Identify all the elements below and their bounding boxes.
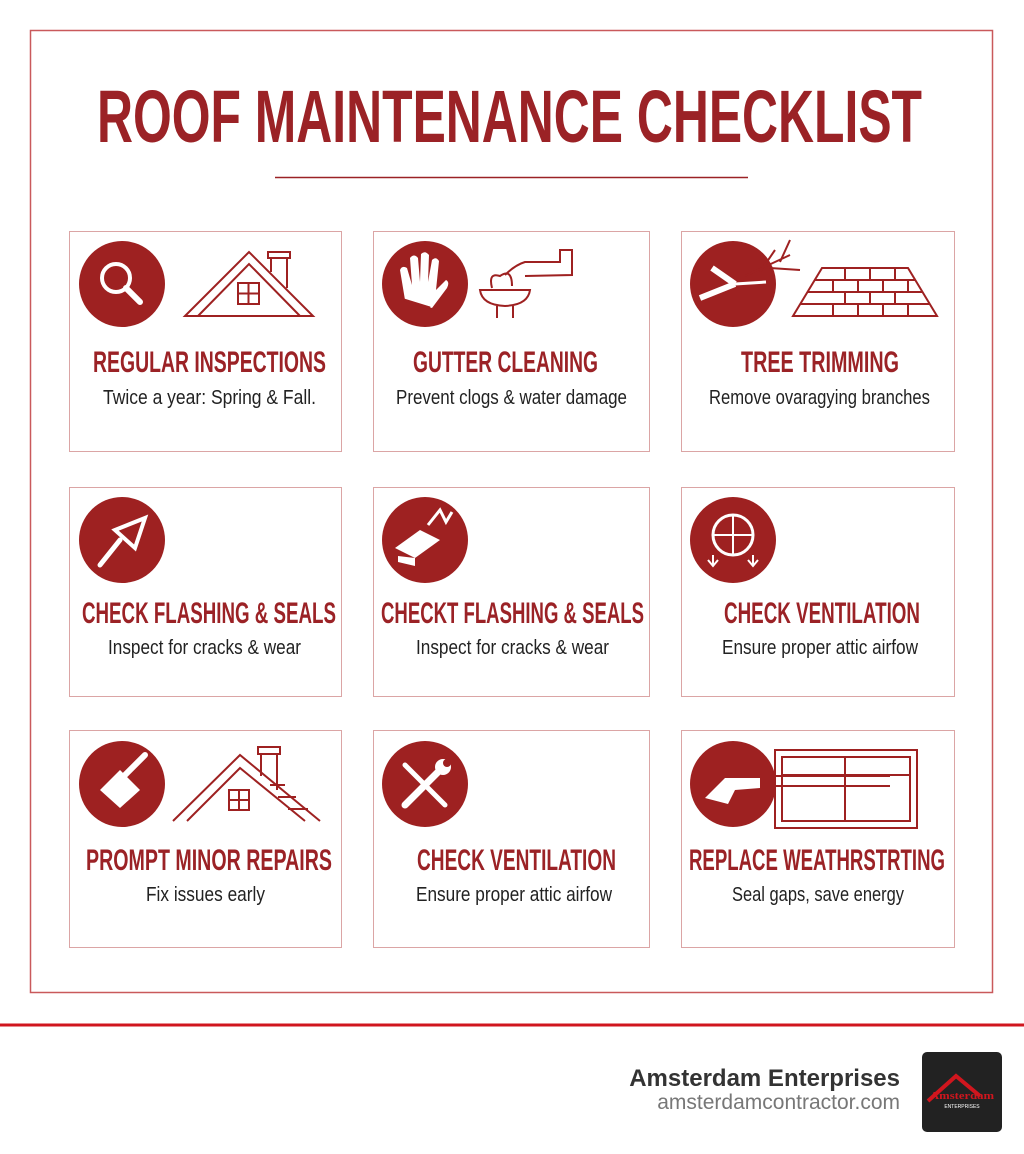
icon: gutter and hand	[480, 250, 572, 318]
heading: TREE TRIMMING	[741, 346, 899, 379]
footer brand: Amsterdam Enterprises	[629, 1065, 900, 1092]
icon: brick roof	[793, 268, 937, 316]
heading: PROMPT MINOR REPAIRS	[86, 844, 332, 877]
heading: GUTTER CLEANING	[413, 346, 598, 379]
card: prompt minor repairs	[70, 730, 342, 948]
card: check ventilation 2	[374, 730, 650, 948]
text: Remove ovaragying branches	[709, 387, 930, 409]
icon: trowel	[79, 497, 165, 583]
logo: Amsterdam	[930, 1090, 994, 1102]
heading: CHECK FLASHING & SEALS	[82, 597, 336, 630]
footer brand	[629, 1065, 900, 1114]
icon: house	[185, 252, 313, 316]
card: check flashing	[70, 488, 342, 696]
text: Seal gaps, save energy	[732, 884, 904, 906]
icon: hand	[690, 741, 776, 827]
icon: vent	[690, 497, 776, 583]
text: Ensure proper attic airfow	[416, 884, 612, 906]
logo: ENTERPRISES	[944, 1104, 980, 1110]
card: check ventilation	[682, 488, 954, 696]
text: Twice a year: Spring & Fall.	[103, 387, 316, 409]
card: tree trimming	[682, 232, 954, 452]
heading: REGULAR INSPECTIONS	[93, 346, 326, 379]
card: gutter cleaning	[374, 232, 650, 452]
icon: magnifier	[79, 241, 165, 327]
heading: CHECK VENTILATION	[417, 844, 616, 877]
text: Inspect for cracks & wear	[416, 637, 609, 659]
text: Inspect for cracks & wear	[108, 637, 301, 659]
card: regular inspections	[70, 232, 342, 452]
icon: glove	[382, 241, 468, 327]
logo	[922, 1052, 1002, 1132]
card: checkt flashing	[374, 488, 650, 696]
icon: scraper	[79, 741, 165, 827]
icon: window frame	[760, 750, 917, 828]
text: Fix issues early	[146, 884, 265, 906]
card: replace weatherstripping	[682, 730, 954, 948]
footer brand: amsterdamcontractor.com	[657, 1091, 900, 1114]
icon: wrench and screwdriver	[382, 741, 468, 827]
text: Ensure proper attic airfow	[722, 637, 918, 659]
heading: CHECKT FLASHING & SEALS	[381, 597, 644, 630]
icon: roof with chimney	[173, 747, 320, 821]
icon: pruners	[690, 240, 800, 327]
text: Prevent clogs & water damage	[396, 387, 627, 409]
icon: shingles	[382, 497, 468, 583]
